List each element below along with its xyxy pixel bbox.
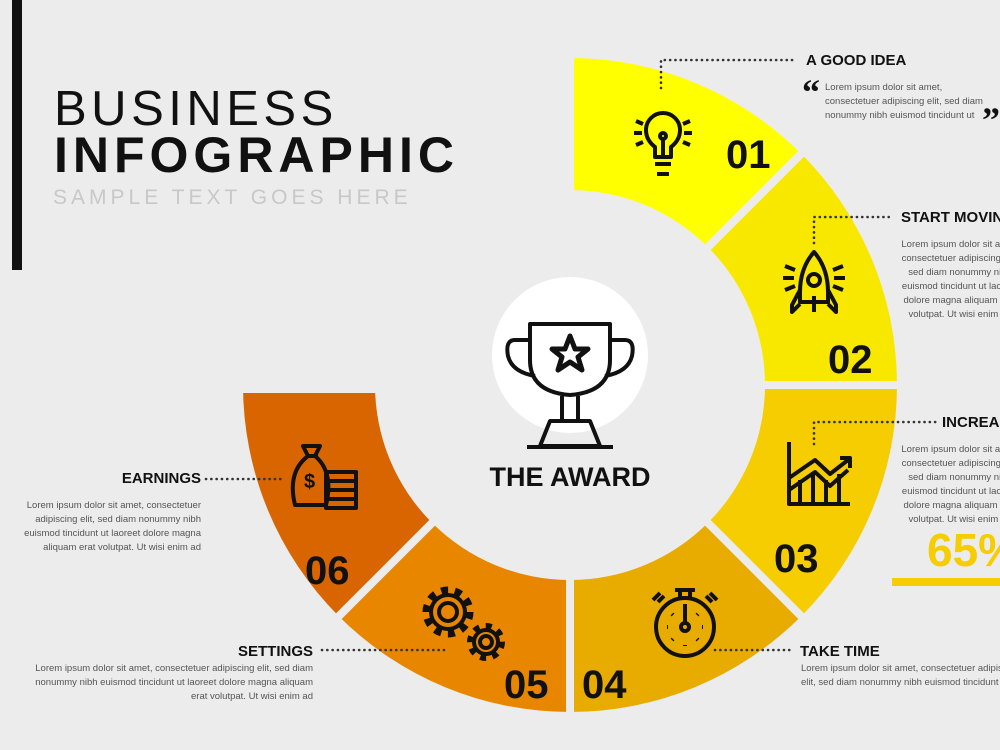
- step 04: 04: [582, 663, 627, 707]
- step 01: [634, 52, 1000, 177]
- step 01: consectetuer adipiscing elit, sed diam: [825, 96, 983, 107]
- center award: [490, 277, 650, 492]
- step 01: 01: [726, 133, 770, 177]
- step 06: adipiscing elit, sed diam nonummy nibh: [35, 514, 201, 525]
- icon: stopwatch: [653, 590, 717, 656]
- step 06: $: [304, 471, 315, 493]
- step 06: 06: [305, 549, 350, 593]
- title block: BUSINESS: [54, 82, 338, 136]
- title block: INFOGRAPHIC: [54, 127, 459, 183]
- step 03: 03: [774, 537, 818, 581]
- title block: SAMPLE TEXT GOES HERE: [53, 186, 412, 209]
- step 05: [35, 590, 548, 707]
- center award: THE AWARD: [490, 462, 650, 492]
- step 02: 02: [828, 338, 872, 382]
- step 01: ”: [982, 100, 1000, 140]
- icon: money bag: [293, 446, 356, 508]
- step 04: [582, 590, 1000, 707]
- icon: growth chart: [789, 442, 850, 504]
- step 06: Lorem ipsum dolor sit amet, consectetuer: [27, 500, 201, 511]
- step 05: erat volutpat. Ut wisi enim ad: [191, 691, 313, 702]
- step 06: aliquam erat volutpat. Ut wisi enim ad: [43, 542, 201, 553]
- icon: gears: [426, 590, 502, 658]
- step 06: [24, 446, 356, 593]
- step 03: [774, 414, 1000, 586]
- icon: lightbulb: [634, 113, 692, 174]
- step 05: nonummy nibh euismod tincidunt ut laoreet dolore magna aliquam: [35, 677, 313, 688]
- step 04: TAKE TIME: [800, 643, 880, 660]
- step 02: [783, 209, 1000, 382]
- icon: rocket: [783, 252, 845, 312]
- step 01: nonummy nibh euismod tincidunt ut: [825, 110, 975, 121]
- step 06: euismod tincidunt ut laoreet dolore magna: [24, 528, 202, 539]
- step 01: Lorem ipsum dolor sit amet,: [825, 82, 942, 93]
- ring segments: [235, 50, 905, 720]
- step 05: 05: [504, 663, 548, 707]
- step 06: EARNINGS: [122, 470, 201, 487]
- step 05: SETTINGS: [238, 643, 313, 660]
- icon: trophy: [507, 324, 633, 447]
- step 05: Lorem ipsum dolor sit amet, consectetuer adipiscing elit, sed diam: [35, 663, 313, 674]
- step 01: “: [802, 72, 820, 112]
- step 01: A GOOD IDEA: [806, 52, 906, 69]
- title block: [12, 0, 459, 270]
